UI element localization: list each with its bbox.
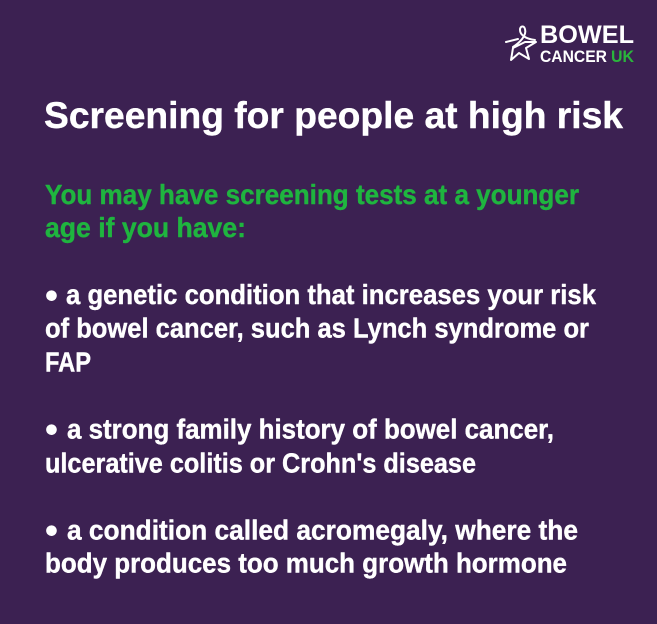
- bullet: acromegaly: [45, 510, 578, 578]
- logo: Bowel Cancer UK: UK: [611, 47, 635, 66]
- bullet: genetic condition: a genetic condition that increases your risk: [66, 279, 597, 310]
- bullet: genetic condition: FAP: [45, 346, 91, 378]
- icon: ribbon star: [506, 26, 536, 60]
- bullet: genetic condition: •: [45, 275, 58, 316]
- logo: Bowel Cancer UK: CANCER: [540, 47, 607, 66]
- bullet: family history: a strong family history of bowel cancer,: [67, 414, 554, 444]
- intro text: [45, 179, 579, 243]
- intro text: You may have screening tests at a younger: [45, 179, 579, 210]
- title: Screening for people at high risk: [44, 95, 623, 136]
- bullet: family history: [45, 409, 554, 478]
- logo wordmark: BOWEL: [540, 21, 634, 49]
- logo: Bowel Cancer UK: [506, 21, 635, 66]
- bullet: family history: ulcerative colitis or Crohn's disease: [45, 448, 476, 478]
- bullet: family history: •: [45, 409, 58, 450]
- bullet: acromegaly: body produces too much growth hormone: [45, 548, 567, 578]
- bullet: genetic condition: of bowel cancer, such as Lynch syndrome or: [45, 312, 589, 344]
- bullet: acromegaly: a condition called acromegaly, where the: [67, 514, 578, 546]
- intro text: age if you have:: [45, 212, 246, 243]
- bullet: acromegaly: •: [45, 510, 58, 551]
- bullet: genetic condition: [45, 275, 597, 378]
